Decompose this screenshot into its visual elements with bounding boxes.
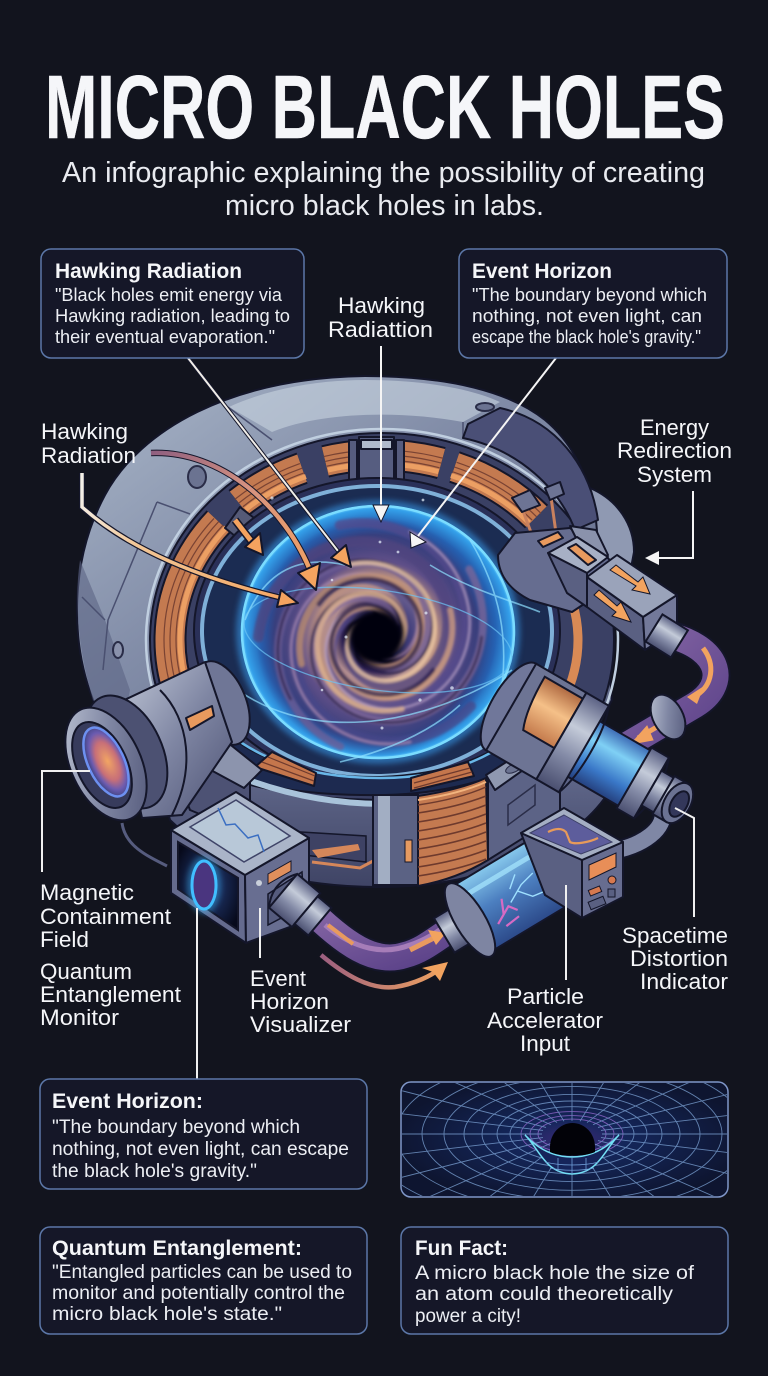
body text: the black hole's gravity."	[52, 1161, 257, 1182]
label: Particle Accelerator Input: Input	[520, 1031, 571, 1056]
body text: micro black hole's state."	[52, 1304, 282, 1325]
heading: Fun Fact:	[415, 1237, 508, 1260]
label: Event Horizon Visualizer: Event	[250, 966, 307, 991]
label: Hawking Radiattion centre: Hawking	[338, 293, 425, 318]
body text	[415, 1263, 695, 1327]
lens glass	[74, 721, 138, 803]
top bracket	[225, 437, 404, 540]
leader: spacetime indicator	[675, 808, 694, 917]
funnel bowl	[525, 1135, 619, 1174]
heading: Event Horizon	[472, 260, 612, 283]
arrow: radiation leader curved	[151, 453, 320, 590]
subtitle: micro black holes in labs.	[225, 190, 544, 222]
copper coils	[164, 450, 596, 830]
right connector block	[488, 752, 560, 860]
energy redirection box	[498, 526, 688, 657]
panel: Fun Fact	[401, 1227, 728, 1334]
label: Energy Redirection System: System	[637, 462, 712, 487]
body text: "The boundary beyond which	[52, 1117, 300, 1138]
label: Particle Accelerator Input: Particle	[507, 984, 584, 1009]
body text: "The boundary beyond which	[472, 285, 707, 305]
box outlet stem	[646, 614, 688, 657]
label: Event Horizon Visualizer: Horizon	[250, 989, 329, 1014]
label: Energy Redirection System	[617, 415, 732, 487]
black hole swirl	[240, 496, 524, 783]
reactor machine illustration	[49, 376, 716, 971]
label: Hawking Radiation left: Radiation	[41, 443, 136, 468]
label: Particle Accelerator Input: Accelerator	[487, 1008, 604, 1033]
arrow: small radiation	[235, 520, 263, 555]
label: Event Horizon Visualizer: Visualizer	[250, 1012, 352, 1037]
body text	[52, 1117, 349, 1182]
label: Hawking Radiation left	[41, 419, 136, 468]
copper panel	[418, 778, 488, 886]
arrow: energy redirection leader	[645, 491, 693, 565]
label: Particle Accelerator Input	[487, 984, 604, 1056]
leader: particle accelerator	[565, 885, 567, 980]
particle accelerator box	[521, 808, 623, 918]
label: Energy Redirection System: Redirection	[617, 438, 732, 463]
label: Magnetic Containment Field: Magnetic	[40, 880, 134, 905]
label: Hawking Radiattion centre	[328, 293, 433, 342]
left connector block	[165, 735, 250, 835]
black sphere	[550, 1123, 595, 1156]
body text	[52, 1262, 352, 1325]
right glass cylinder	[469, 654, 714, 853]
body text: monitor and potentially control the	[52, 1283, 345, 1304]
left lens cylinder	[49, 653, 261, 833]
arrow: centre Hawking label	[373, 346, 389, 522]
body text: an atom could theoretically	[415, 1284, 674, 1305]
energy arcs and particles	[225, 496, 540, 762]
panel: Hawking Radiation	[41, 249, 304, 358]
body text: "Entangled particles can be used to	[52, 1262, 352, 1283]
label: Spacetime Distortion Indicator	[622, 923, 729, 994]
monitor screen	[178, 842, 238, 930]
coil struts	[512, 482, 564, 535]
body text: their eventual evaporation."	[55, 327, 275, 347]
dark arch	[463, 408, 598, 530]
right dome	[590, 488, 634, 600]
subtitle: An infographic explaining the possibility of creating	[62, 157, 705, 189]
leader: magnetic field	[42, 771, 90, 872]
body text	[55, 285, 290, 347]
purple tube right	[610, 636, 716, 755]
body text: nothing, not even light, can escape	[52, 1139, 349, 1160]
panel: Event Horizon top	[459, 249, 727, 358]
label: Quantum Entanglement Monitor	[40, 959, 182, 1030]
label: Quantum Entanglement Monitor: Quantum	[40, 959, 132, 984]
panel: spacetime funnel diagram	[400, 1081, 729, 1198]
panel: Quantum Entanglement	[40, 1227, 367, 1334]
label: Spacetime Distortion Indicator: Indicator	[640, 969, 729, 994]
curved orange flow arrow	[321, 955, 448, 987]
inner right coil	[182, 480, 578, 800]
body text: "Black holes emit energy via	[55, 285, 283, 305]
containment ring	[194, 478, 560, 784]
base band	[122, 725, 610, 887]
funnel grid	[402, 1083, 727, 1196]
inner recess	[146, 429, 618, 851]
quantum entanglement monitor box	[171, 792, 309, 943]
pipe behind cylinder	[618, 808, 663, 850]
label: Hawking Radiation left: Hawking	[41, 419, 128, 444]
box arrows	[610, 565, 650, 594]
label: Energy Redirection System: Energy	[640, 415, 710, 440]
label: Magnetic Containment Field: Containment	[40, 904, 172, 929]
tube fitting	[263, 869, 334, 939]
outer shell	[77, 376, 612, 860]
body text: A micro black hole the size of	[415, 1263, 695, 1284]
label: Quantum Entanglement Monitor: Monitor	[40, 1005, 120, 1030]
label: Hawking Radiattion centre: Radiattion	[328, 317, 433, 342]
arrow: from Event Horizon box	[410, 358, 556, 548]
label: Event Horizon Visualizer	[250, 966, 352, 1037]
subtitle	[62, 157, 705, 222]
leader: quantum monitor	[196, 908, 198, 1079]
label: Magnetic Containment Field: Field	[40, 927, 89, 952]
label: Spacetime Distortion Indicator: Distortion	[630, 946, 728, 971]
label: Magnetic Containment Field	[40, 880, 172, 952]
body text: Hawking radiation, leading to	[55, 306, 290, 326]
heading: Event Horizon:	[52, 1090, 203, 1113]
arrow: radiation leader left	[82, 473, 298, 607]
lower purple tube	[305, 905, 458, 958]
panel: Event Horizon definition	[40, 1079, 367, 1189]
heading: Hawking Radiation	[55, 260, 242, 283]
plasma orb	[236, 500, 520, 764]
body text: escape the black hole's gravity."	[472, 327, 701, 347]
body text: power a city!	[415, 1306, 521, 1327]
leader: event horizon visualizer	[259, 908, 261, 958]
body text	[472, 285, 707, 347]
heading: Quantum Entanglement:	[52, 1237, 302, 1260]
body text: nothing, not even light, can	[472, 306, 702, 326]
label: Spacetime Distortion Indicator: Spacetime	[622, 923, 728, 948]
label: Quantum Entanglement Monitor: Entanglement	[40, 982, 182, 1007]
particle accelerator glass	[423, 827, 586, 971]
arrow: from Hawking Radiation box	[188, 358, 351, 567]
